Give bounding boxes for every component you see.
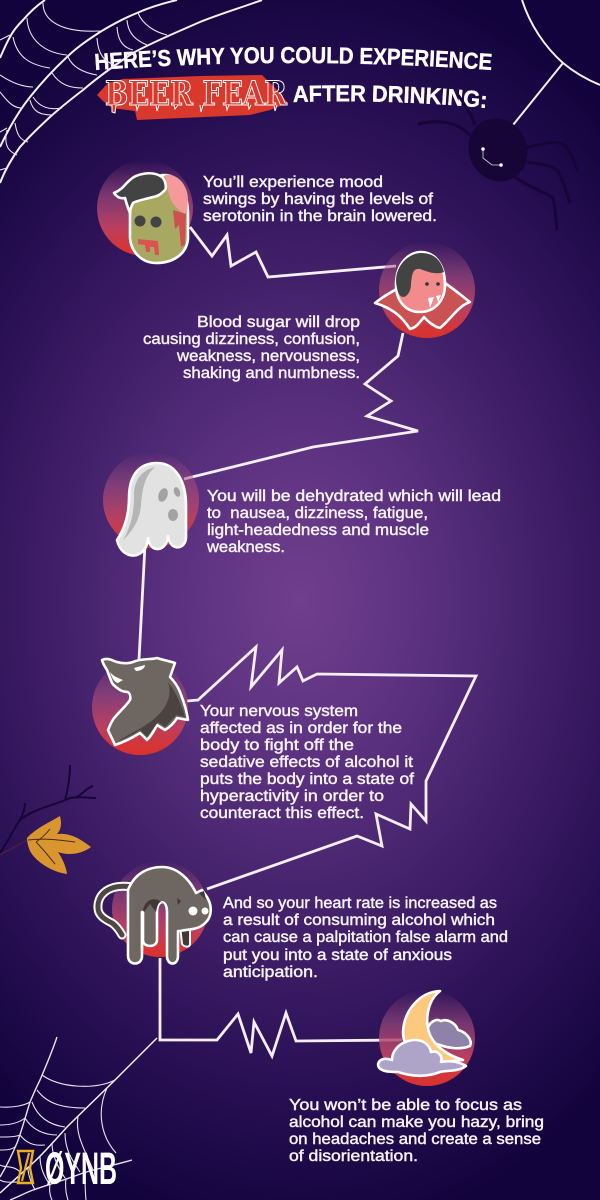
text: nervous system: Your nervous system (200, 703, 358, 720)
text: blood sugar: causing dizziness, confusion, (143, 331, 360, 348)
connector line: wolf to cat (187, 647, 476, 889)
text: dehydration (206, 488, 501, 556)
text: nervous system: puts the body into a state of (200, 771, 415, 788)
panel: cat heart rate (98, 861, 508, 981)
text: blood sugar: Blood sugar will drop (197, 314, 360, 331)
icon: spider (418, 95, 578, 230)
text: dehydration: weakness. (206, 539, 285, 556)
spider web: top right with thread (513, 0, 600, 125)
icon: crescent moon and clouds (378, 990, 475, 1086)
connector line: cat to moon (160, 958, 402, 1056)
logo (18, 1143, 117, 1194)
icon: cat (98, 861, 211, 964)
icon: wolf (92, 658, 188, 755)
text: mood swings (203, 174, 437, 225)
text: heart rate: And so your heart rate is increased as (223, 895, 497, 912)
text: heart rate: can cause a palpitation false alarm and (223, 929, 508, 946)
text: focus (289, 1097, 544, 1165)
title: HERE’S WHY YOU COULD EXPERIENCE (95, 46, 492, 70)
text: focus: on headaches and create a sense (289, 1131, 541, 1148)
panel: vampire blood sugar (143, 242, 475, 382)
icon: vampire (375, 242, 475, 338)
panel: moon focus (289, 990, 544, 1165)
logo wordmark: ØYNB (45, 1143, 117, 1194)
text: heart rate: put you into a state of anxious (223, 947, 452, 964)
connector line: zombie to vampire (190, 227, 396, 277)
text: nervous system: hyperactivity in order to (200, 788, 384, 805)
text: nervous system (200, 703, 415, 822)
text: nervous system: body to fight off the (200, 737, 354, 754)
text: mood swings: You’ll experience mood (203, 174, 383, 191)
text: blood sugar (143, 314, 360, 382)
icon: branch with leaf (0, 765, 96, 874)
text: focus: You won’t be able to focus as (289, 1097, 522, 1114)
connector line: vampire to ghost (184, 333, 418, 479)
text: nervous system: sedative effects of alcohol it (200, 754, 414, 771)
text: nervous system: counteract this effect. (200, 805, 364, 822)
panel: zombie mood swings (97, 160, 437, 263)
text: nervous system: affected as in order for the (200, 720, 402, 737)
text: heart rate: anticipation. (223, 964, 318, 981)
panel: wolf nervous system (92, 658, 415, 822)
text: mood swings: swings by having the levels of (203, 191, 434, 208)
text: blood sugar: shaking and numbness. (183, 365, 360, 382)
panel: ghost dehydration (103, 452, 501, 556)
text: dehydration: You will be dehydrated which will lead (207, 488, 501, 505)
text: focus: alcohol can make you hazy, bring (289, 1114, 544, 1131)
text: dehydration: to nausea, dizziness, fatigue, (207, 505, 428, 522)
spider web: top left (0, 0, 262, 183)
beer fear drip lettering: BEER FEAR (105, 74, 288, 114)
beer fear red brush highlight (97, 75, 288, 120)
connector line: ghost to wolf (139, 545, 145, 660)
title: AFTER DRINKING: (293, 85, 486, 108)
icon: beer glass (18, 1151, 33, 1183)
text: dehydration: light-headedness and muscle (207, 522, 429, 539)
lettering drips (112, 105, 277, 113)
text: heart rate (223, 895, 508, 981)
spider web: bottom left (0, 1037, 157, 1200)
text: heart rate: a result of consuming alcohol which (223, 912, 495, 929)
text: blood sugar: weakness, nervousness, (176, 348, 360, 365)
text: focus: of disorientation. (289, 1148, 418, 1165)
title (95, 46, 492, 120)
icon: ghost (103, 452, 199, 556)
text: mood swings: serotonin in the brain lowered. (203, 208, 437, 225)
icon: zombie (97, 160, 193, 263)
